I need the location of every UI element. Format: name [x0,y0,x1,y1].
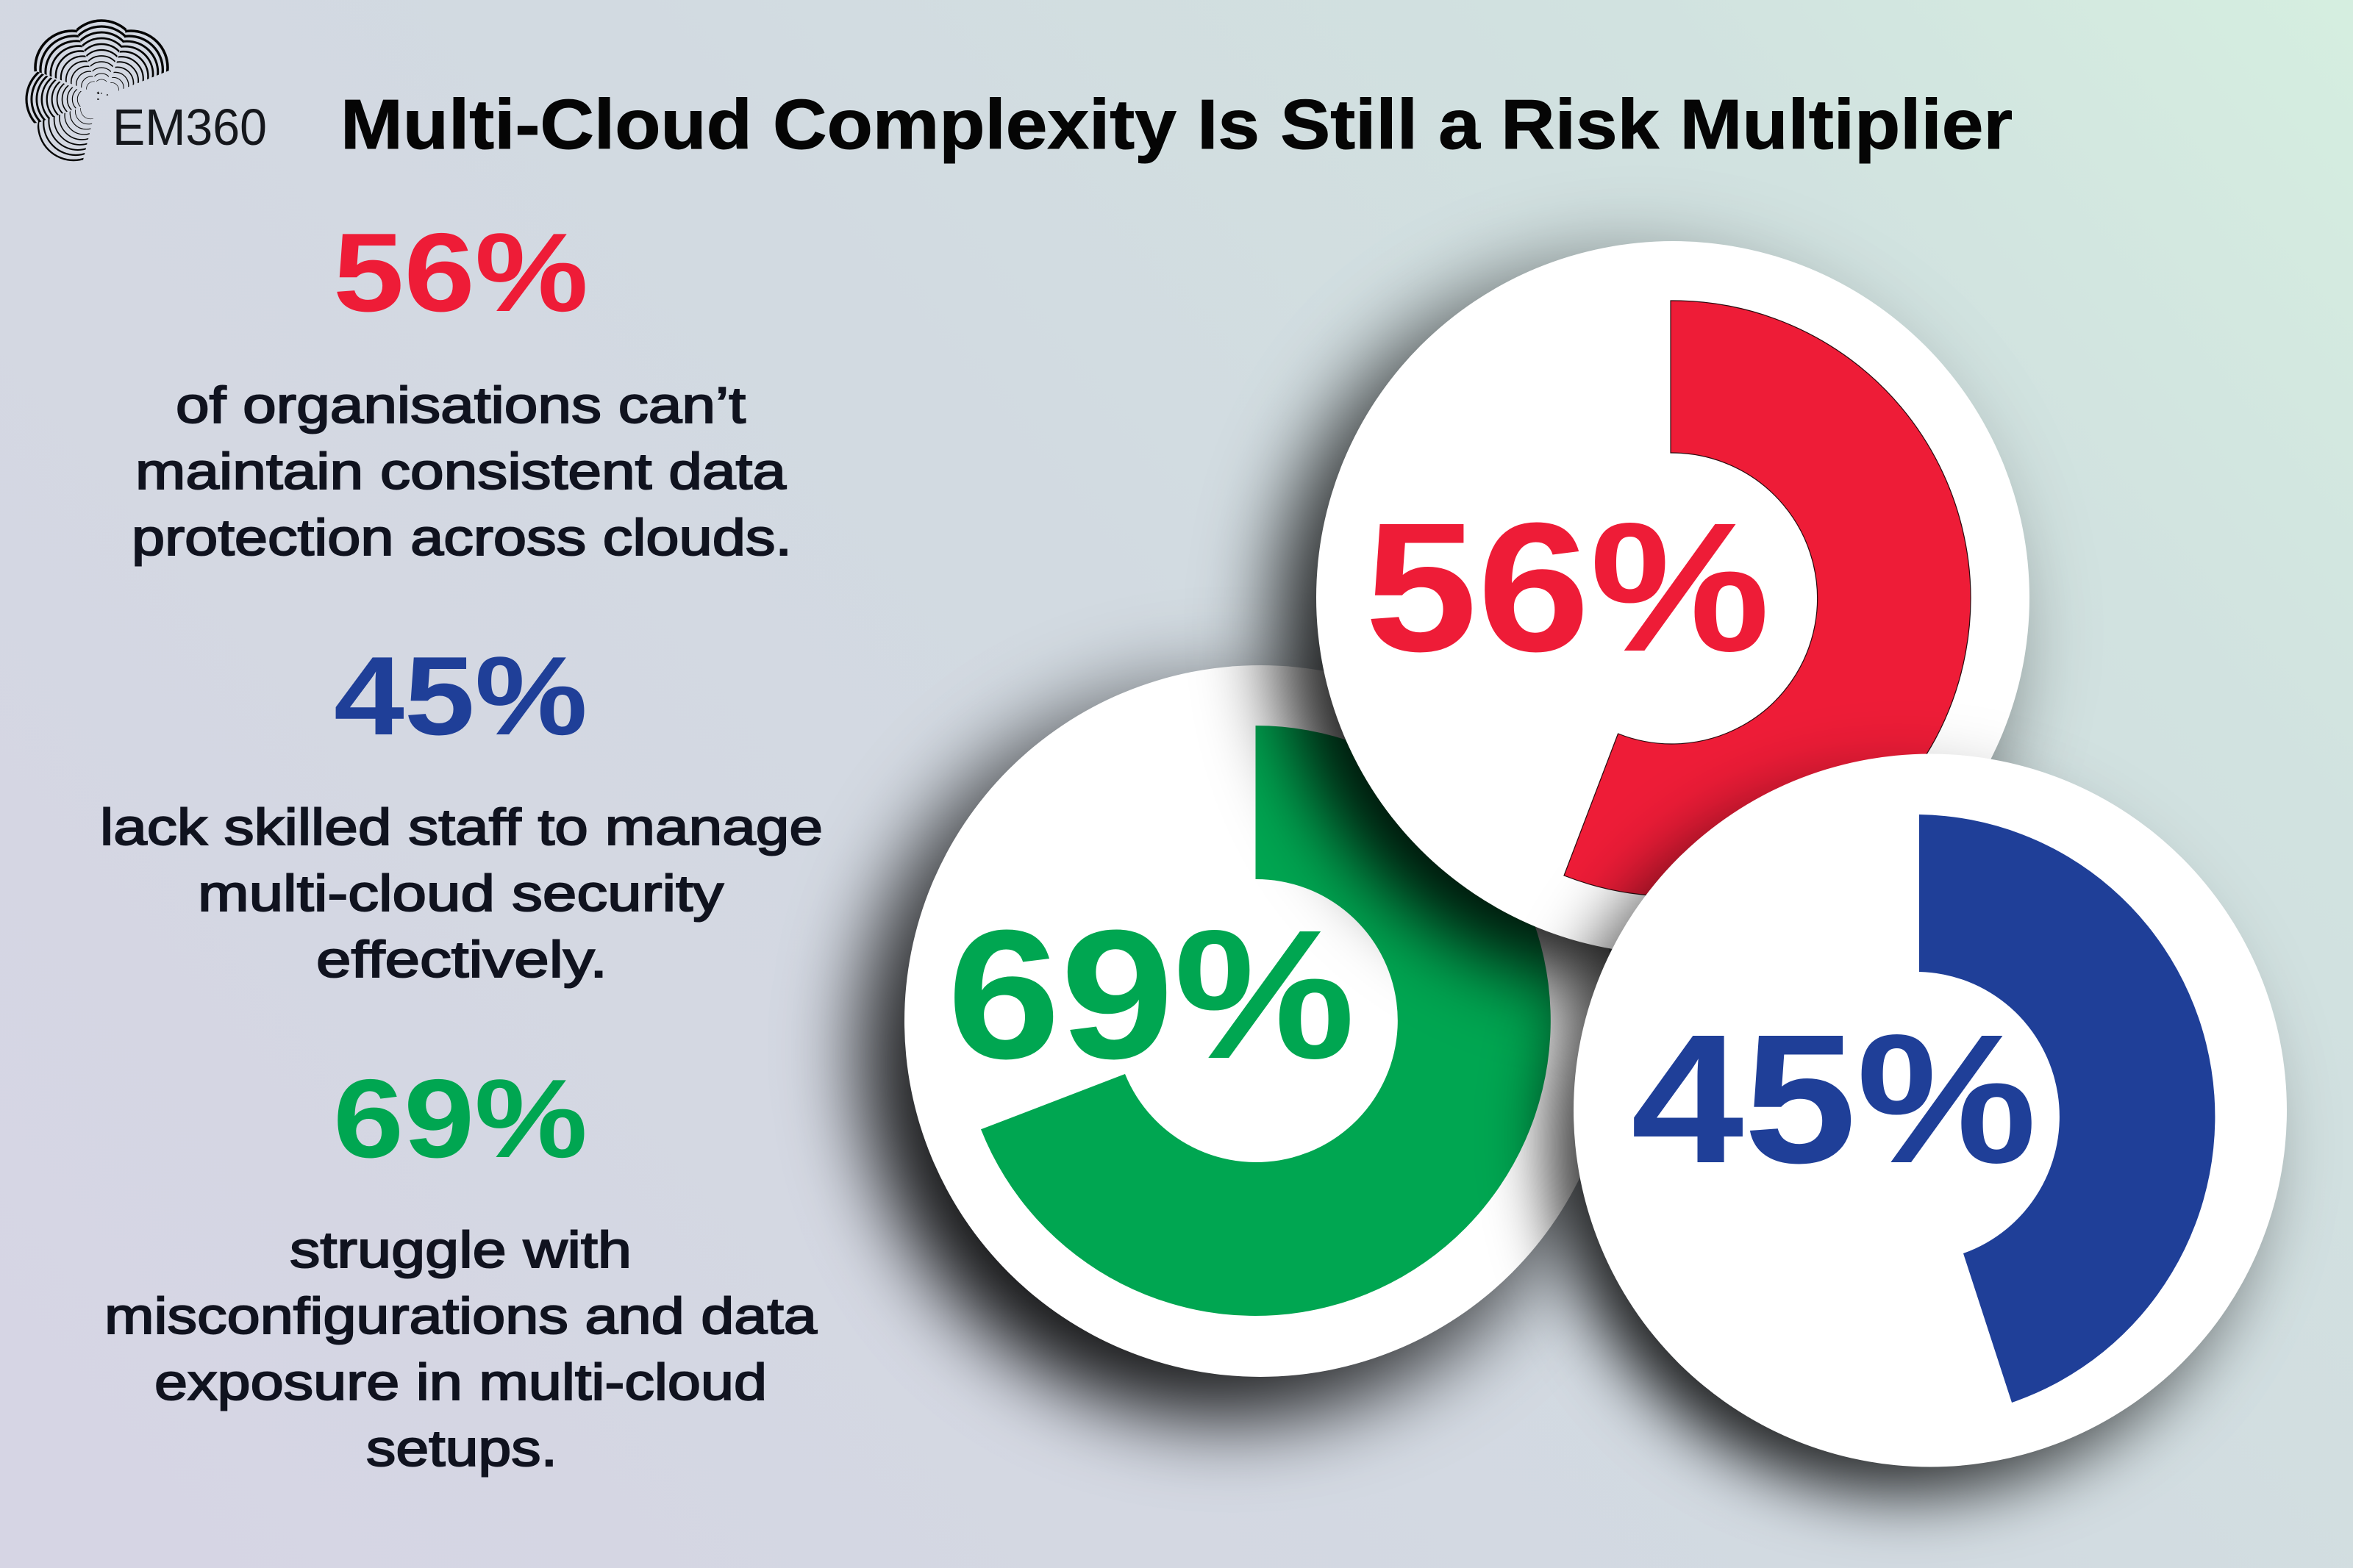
stat description 56%: of organisations can’t [176,376,746,434]
shadow: green disc [861,673,1608,1420]
ring: 45% segment [1919,815,2215,1403]
stat description 69%: setups. [366,1420,557,1477]
stat number 69%: 69% [333,1056,588,1181]
stat description 45%: multi-cloud security [198,864,724,922]
stat description 45%: effectively. [316,931,607,988]
stat description 69%: exposure in multi-cloud [154,1353,767,1411]
panel: statistic 45% [100,634,823,988]
value: 45%: 45% [1631,996,2037,1201]
logo mark [26,21,168,160]
disc: green [904,665,1616,1377]
value: 69%: 69% [947,892,1355,1097]
disc: blue [1574,754,2287,1467]
shadow: red disc [1277,251,2017,991]
stat description 69%: struggle with [290,1221,632,1278]
shadow: blue disc [1549,769,2275,1495]
panel: statistic 69% [104,1056,817,1477]
chart: 56% donut [1277,241,2029,991]
stat description 69%: misconfigurations and data [104,1287,817,1345]
logo wordmark: EM360 [113,99,267,156]
stat description 56%: protection across clouds. [132,509,792,566]
ring: 69% segment [981,726,1551,1316]
stat description 69% [104,1221,817,1477]
disc: red [1316,241,2029,954]
ring: 56% segment [1564,301,1971,896]
icon: EM360 logo [26,21,267,160]
stat description 56%: maintain consistent data [135,443,786,500]
stat description 45%: lack skilled staff to manage [100,798,823,856]
chart: 45% donut [1549,754,2287,1495]
chart: 69% donut [861,665,1616,1420]
stat number 56%: 56% [333,210,588,335]
value: 56%: 56% [1365,484,1770,690]
panel: statistic 56% [132,210,792,566]
stat description 56% [132,376,792,566]
stat description 45% [100,798,823,988]
title: Multi-Cloud Complexity Is Still a Risk Multiplier [340,85,2013,164]
stat number 45%: 45% [334,634,588,759]
